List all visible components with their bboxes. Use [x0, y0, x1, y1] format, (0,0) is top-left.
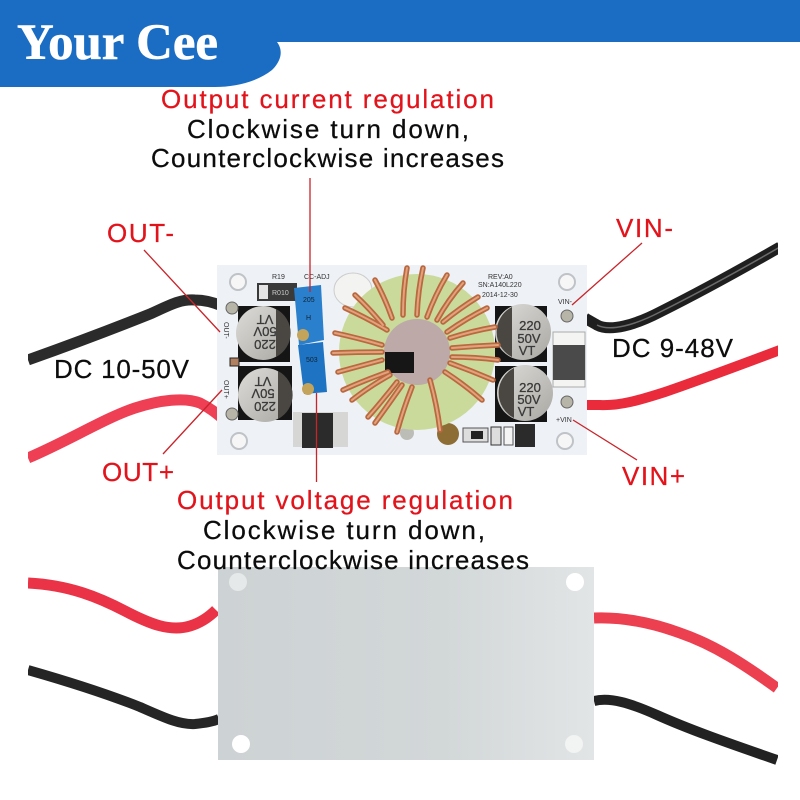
- toroid inductor: [333, 268, 498, 432]
- capacitor bases: [238, 306, 547, 422]
- label: VIN+: VIN+: [622, 461, 685, 491]
- heading: output voltage regulation: Output voltage regulation: [177, 485, 513, 515]
- leader: current pot: [309, 178, 311, 292]
- red leader lines: [144, 178, 642, 482]
- header banner: [0, 0, 800, 87]
- right capacitors: 50V: [517, 331, 541, 346]
- silkscreen labels: CC-ADJ: [304, 274, 330, 281]
- heading: output current regulation: Output current regulation: [161, 84, 494, 114]
- label: VIN-: VIN-: [616, 213, 673, 243]
- terminal pads: [226, 302, 573, 420]
- left capacitors: 220: [254, 399, 276, 414]
- left capacitors: 50V: [253, 324, 277, 339]
- heading: output current regulation: Clockwise turn down,: [187, 114, 469, 144]
- silkscreen labels: VIN-: [558, 299, 573, 306]
- blue trimmer potentiometers: [294, 285, 327, 395]
- silkscreen labels: REV:A0: [488, 274, 513, 281]
- right capacitors: VT: [518, 404, 534, 419]
- right capacitors: 50V: [517, 392, 541, 407]
- right capacitors: 220: [519, 380, 541, 395]
- blue trimmer potentiometers: 503: [306, 357, 318, 364]
- circuit board module: [217, 265, 587, 455]
- label: DC output range: DC 10-50V: [54, 354, 190, 384]
- right capacitors: VT: [519, 343, 535, 358]
- leader: voltage pot: [316, 393, 318, 482]
- transistor Q1: [515, 424, 535, 447]
- silkscreen labels: +VIN: [556, 417, 572, 424]
- heading: output voltage regulation: Clockwise turn down,: [203, 515, 485, 545]
- aluminium backplate: [218, 567, 594, 760]
- leader: OUT+: [163, 390, 222, 454]
- left capacitors: 220: [254, 337, 276, 352]
- top module wires: [28, 247, 780, 458]
- board: [217, 265, 587, 455]
- silkscreen labels: OUT-: [222, 322, 229, 339]
- left capacitors: 50V: [251, 386, 275, 401]
- leader: VIN+: [573, 420, 637, 460]
- blue trimmer potentiometers: 205: [303, 297, 315, 304]
- small parts: [230, 358, 513, 445]
- brand name: Your Cee: [17, 15, 218, 71]
- centre PCB and chip: [384, 319, 450, 385]
- resistor R010: [257, 283, 297, 301]
- mounting holes: [230, 274, 575, 449]
- resistor R010: R010: [272, 290, 289, 297]
- leader: OUT-: [144, 250, 220, 332]
- silkscreen labels: 2014-12-30: [482, 292, 518, 299]
- label: DC input range: DC 9-48V: [612, 333, 734, 363]
- silkscreen labels: R19: [272, 274, 285, 281]
- right capacitors: [495, 304, 553, 421]
- leader: VIN-: [572, 243, 642, 305]
- silkscreen labels: OUT+: [222, 380, 229, 399]
- left capacitors: VT: [257, 312, 273, 327]
- label: OUT+: OUT+: [102, 457, 174, 487]
- left capacitors: VT: [255, 374, 271, 389]
- blue trimmer potentiometers: H: [306, 315, 311, 322]
- bottom module wires: [28, 583, 777, 760]
- copper windings: [333, 268, 498, 432]
- heading: output voltage regulation: Counterclockwise increases: [177, 545, 529, 575]
- silkscreen labels: SN:A140L220: [478, 282, 522, 289]
- right capacitors: 220: [519, 318, 541, 333]
- rectifier D1: [553, 332, 585, 387]
- silkscreen labels: [222, 274, 573, 424]
- label: OUT-: OUT-: [107, 218, 174, 248]
- diode package: [293, 412, 348, 448]
- left capacitors: [236, 306, 293, 422]
- heading: output voltage regulation: [177, 485, 529, 575]
- plate holes: [229, 573, 584, 753]
- heading: output current regulation: Counterclockwise increases: [151, 143, 504, 173]
- heading: output current regulation: [151, 84, 504, 173]
